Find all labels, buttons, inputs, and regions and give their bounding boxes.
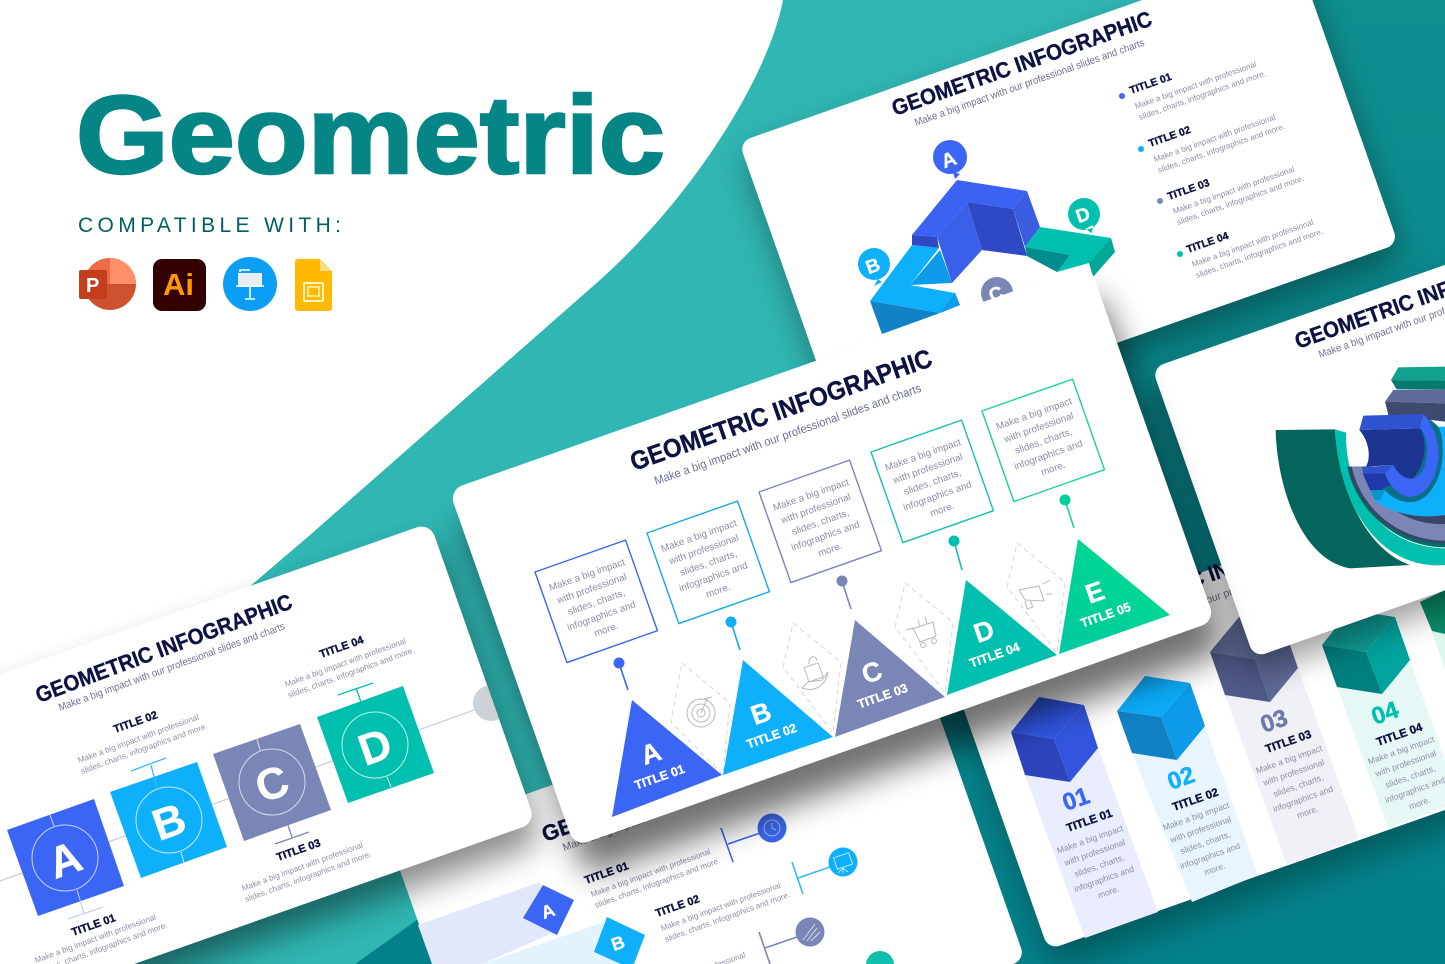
icon: Google Slides xyxy=(295,259,332,311)
text box C: more. xyxy=(817,541,844,559)
triangle A: TITLE 01 xyxy=(633,762,687,792)
label: title 03: Make a big impact with professional xyxy=(241,841,364,893)
text box D xyxy=(871,420,993,543)
cube 1 xyxy=(1011,697,1098,782)
shadow: top right slide xyxy=(743,0,1402,455)
cube 4 xyxy=(1322,610,1410,694)
text box B: infographics and xyxy=(678,560,749,595)
triangle C xyxy=(835,620,945,737)
text box E xyxy=(982,379,1104,502)
cube 2 xyxy=(1117,676,1205,760)
square B xyxy=(110,758,227,878)
label: title 02: slides, charts, infographics and more. xyxy=(80,722,209,776)
column 3 xyxy=(1210,617,1359,865)
text box D: Make a big impact xyxy=(884,437,963,474)
icon: Illustrator xyxy=(153,259,206,311)
triangle D: TITLE 04 xyxy=(968,640,1022,670)
square B: B xyxy=(146,794,192,851)
list item 03: TITLE 03 xyxy=(1166,177,1211,203)
text box D: with professional xyxy=(891,452,964,487)
dashed diamond: target xyxy=(671,663,730,775)
connector and icon 3 xyxy=(759,918,824,964)
connector and icon 2 xyxy=(792,848,858,894)
square D: D xyxy=(352,719,398,776)
label: title 02: Make a big impact with professional xyxy=(77,713,200,765)
main title: GEOMETRIC INFOGRAPHIC xyxy=(626,343,936,477)
column 1: infographics and xyxy=(1073,864,1136,894)
column 4: slides, charts, xyxy=(1384,763,1437,790)
list item 04: TITLE 04 xyxy=(1185,230,1230,256)
diamond A xyxy=(523,885,574,935)
triangle A: A xyxy=(637,736,665,771)
text box C: infographics and xyxy=(790,519,861,554)
column 2 xyxy=(1117,676,1258,902)
column 2: infographics and xyxy=(1179,841,1242,871)
label: title 03: slides, charts, infographics and more. xyxy=(244,850,373,904)
triangle B: B xyxy=(747,696,775,731)
pin B xyxy=(858,248,890,286)
list item 02: Make a big impact with professional xyxy=(1153,113,1277,164)
column 3: TITLE 03 xyxy=(1264,729,1313,756)
slide: squares (left) xyxy=(0,523,536,964)
3D arrow shape xyxy=(870,180,1115,334)
slide: cubes (bottom right) xyxy=(947,463,1445,950)
pins xyxy=(614,494,1074,690)
column 1: TITLE 01 xyxy=(1065,807,1115,835)
slide subtitle: Make a big impact with our professional slides and charts xyxy=(913,38,1146,129)
triangle C: C xyxy=(858,655,886,690)
column 3: with professional xyxy=(1261,757,1326,788)
text box E: slides, charts, xyxy=(1014,427,1074,457)
label: title 04: TITLE 04 xyxy=(318,634,366,661)
text box E: more. xyxy=(1040,460,1067,478)
icon: PowerPoint: P xyxy=(86,275,99,297)
connector and icon 1 xyxy=(721,814,786,862)
shadow: cube slide xyxy=(953,481,1445,964)
pin B: B xyxy=(863,255,883,279)
title 01 block: Make a big impact with professional xyxy=(590,847,712,899)
column 1: Make a big impact xyxy=(1055,823,1125,855)
column 1: more. xyxy=(1097,884,1121,900)
pin D xyxy=(1068,198,1100,233)
pin C: C xyxy=(986,283,1006,307)
label: title 01: Make a big impact with professional xyxy=(34,913,157,964)
label: title 04: Make a big impact with professional xyxy=(284,637,407,689)
list item 01: slides, charts, infographics and more. xyxy=(1138,69,1267,122)
text box C: Make a big impact xyxy=(772,477,851,514)
pale band A xyxy=(418,882,560,964)
icon: Illustrator: Ai xyxy=(163,267,194,302)
list item 03: Make a big impact with professional xyxy=(1172,165,1296,216)
column 2: 02 xyxy=(1164,761,1198,796)
label: title 03: TITLE 03 xyxy=(275,837,322,864)
triangle B: TITLE 02 xyxy=(745,721,799,751)
text box D: infographics and xyxy=(902,479,973,514)
column 4 xyxy=(1322,610,1445,828)
connector line xyxy=(0,710,474,881)
letter B: B xyxy=(609,932,627,955)
text box A: Make a big impact xyxy=(548,557,627,594)
icon: cart xyxy=(906,617,936,648)
triangle A xyxy=(612,700,722,817)
pale band B xyxy=(482,921,632,964)
text box E: with professional xyxy=(1002,411,1075,446)
square A: A xyxy=(42,832,88,889)
icon: target xyxy=(687,697,715,727)
title 02 block: Make a big impact with professional xyxy=(660,881,782,933)
square C: C xyxy=(249,756,295,813)
main heading: Geometric xyxy=(76,74,665,197)
text box A: slides, charts, xyxy=(567,588,627,618)
slide title fragment: GEOMETRIC xyxy=(538,779,672,847)
column 2: slides, charts, xyxy=(1179,829,1232,856)
triangle E: TITLE 05 xyxy=(1079,600,1133,630)
triangle C: TITLE 03 xyxy=(856,681,910,711)
column 2: TITLE 02 xyxy=(1171,787,1220,814)
text box B: slides, charts, xyxy=(679,549,739,579)
text box B xyxy=(647,501,769,624)
column 1: slides, charts, xyxy=(1073,852,1126,879)
3D concentric arcs xyxy=(1276,367,1445,568)
dashed diamond: bag xyxy=(783,623,841,733)
triangle D: D xyxy=(970,614,998,649)
label: title 01: TITLE 01 xyxy=(70,912,117,939)
dashed diamond: cart xyxy=(895,583,953,693)
list item 02: TITLE 02 xyxy=(1147,124,1192,150)
column 4: infographics and xyxy=(1384,775,1445,805)
triangle E: E xyxy=(1082,575,1108,610)
column 2: Make a big impact xyxy=(1161,800,1231,832)
icon: hand with bag xyxy=(802,657,828,689)
title 01 block: TITLE 01 xyxy=(583,860,630,887)
column 4: more. xyxy=(1408,795,1432,811)
text box D: more. xyxy=(929,501,956,519)
pin A xyxy=(933,140,967,179)
title 01 block: slides, charts, infographics and more. xyxy=(594,856,721,910)
square C xyxy=(213,724,331,844)
list item 03: slides, charts, infographics and more. xyxy=(1176,174,1305,227)
slide title: GEOMETRIC INFOGRAPHIC xyxy=(32,589,296,708)
shadow: left slide xyxy=(0,543,542,964)
label: title 04: slides, charts, infographics and more. xyxy=(287,646,416,700)
column 3: 03 xyxy=(1257,704,1291,739)
shadow: right slide xyxy=(1146,187,1445,676)
icon 4 xyxy=(866,951,894,964)
pin D: D xyxy=(1073,204,1093,228)
pin A: A xyxy=(939,148,959,173)
dashed diamond: megaphone xyxy=(1007,543,1065,653)
square A xyxy=(7,799,124,919)
text box A: with professional xyxy=(555,572,628,607)
shadow: main slide xyxy=(461,294,1227,877)
list item 04: slides, charts, infographics and more. xyxy=(1195,227,1324,280)
column 3: slides, charts, xyxy=(1272,772,1325,799)
text box C: slides, charts, xyxy=(791,508,851,538)
compatibility label: COMPATIBLE WITH: xyxy=(78,214,341,237)
column 1: with professional xyxy=(1062,837,1127,868)
slide subtitle fragment: Make a big impact xyxy=(561,814,645,854)
triangle D xyxy=(947,580,1057,695)
end circle xyxy=(473,686,499,721)
main subtitle: Make a big impact with our professional slides and charts xyxy=(652,381,923,488)
text box B: more. xyxy=(705,582,732,600)
list item 02: slides, charts, infographics and more. xyxy=(1157,122,1286,175)
text box A xyxy=(535,540,657,663)
text box B: Make a big impact xyxy=(660,518,739,555)
letter A: A xyxy=(539,900,557,923)
pin C xyxy=(981,277,1013,309)
column 1: 01 xyxy=(1059,782,1093,817)
slide title fragment: GEOMETRIC INFOGRAPHIC xyxy=(1081,515,1349,630)
column 4: Make a big impact xyxy=(1366,734,1436,766)
list item 04: Make a big impact with professional xyxy=(1191,218,1315,269)
slide: concentric arcs (right) xyxy=(1152,169,1445,658)
text box A: infographics and xyxy=(566,599,637,634)
slide subtitle fragment: Make a big impact with our professional slides and charts xyxy=(1101,543,1356,643)
column 5 fragment xyxy=(1420,590,1445,670)
text box C: with professional xyxy=(779,492,852,527)
column 4: TITLE 04 xyxy=(1375,721,1425,749)
label: title 02: TITLE 02 xyxy=(112,709,159,736)
column 2: more. xyxy=(1203,861,1227,877)
column 4: with professional xyxy=(1373,748,1438,779)
square D xyxy=(317,683,434,803)
column 3: Make a big impact xyxy=(1254,743,1324,775)
slide title: GEOMETRIC INFOGRAPHIC xyxy=(888,6,1155,121)
slide: timeline list (bottom centre) xyxy=(390,656,1025,964)
text box D: slides, charts, xyxy=(903,468,963,498)
text box B: with professional xyxy=(667,533,740,568)
list item 01: TITLE 01 xyxy=(1128,71,1173,97)
icon: PowerPoint xyxy=(79,258,136,310)
triangle B xyxy=(723,660,833,775)
list item 01: Make a big impact with professional xyxy=(1134,60,1258,111)
text box A: more. xyxy=(593,621,620,639)
column 3: more. xyxy=(1296,804,1320,820)
title 02 block: TITLE 02 xyxy=(654,893,701,920)
slide: 3D arrows (top right) xyxy=(739,0,1398,439)
column 2: with professional xyxy=(1168,814,1233,845)
text box E: Make a big impact xyxy=(995,396,1074,433)
slide subtitle: Make a big impact with our professional slides and charts xyxy=(57,621,287,714)
column 3: infographics and xyxy=(1272,784,1335,814)
slide: main triangles xyxy=(449,264,1215,847)
diamond B xyxy=(594,917,645,964)
icon: Keynote xyxy=(223,257,277,311)
column 1 xyxy=(1011,697,1158,938)
text box C xyxy=(759,460,881,583)
text box E: infographics and xyxy=(1013,438,1084,473)
title 02 block: slides, charts, infographics and more. xyxy=(664,890,791,944)
triangle E xyxy=(1059,539,1170,654)
icon: megaphone xyxy=(1019,580,1052,609)
cube 3 xyxy=(1210,617,1298,702)
column 4: 04 xyxy=(1368,696,1403,731)
